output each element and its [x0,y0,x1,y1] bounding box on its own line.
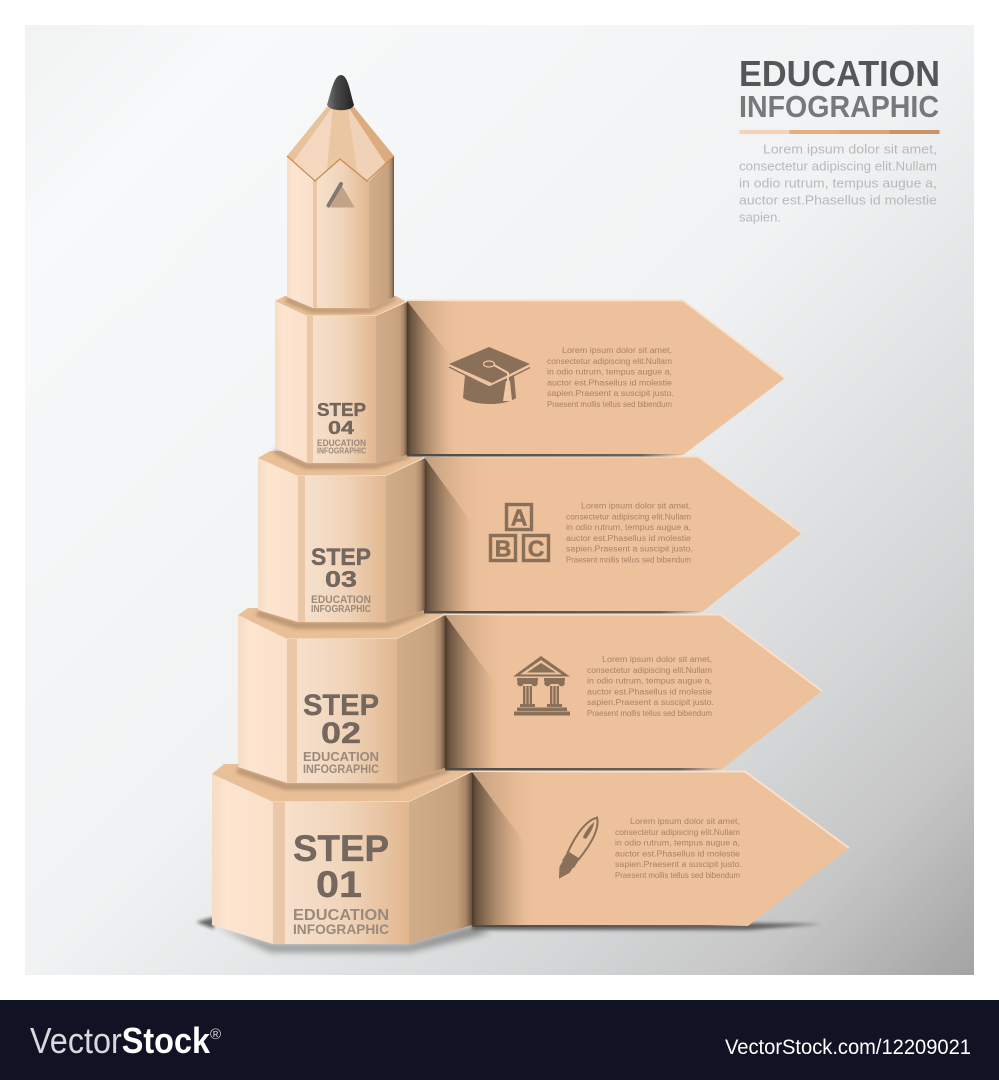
arrow 3 text: auctor est.Phasellus id molestie [566,534,692,543]
footer logo: VectorStock [30,1020,211,1061]
icon: temple [513,656,570,716]
step 1 label [293,828,389,937]
step 2 label [303,689,379,776]
step 3 label: STEP [311,544,371,571]
arrow 2 text: sapien.Praesent a suscipit justo. [587,698,714,707]
step 4 block [275,296,407,463]
step 4 label: 04 [328,418,354,438]
arrow 3 text: consectetur adipiscing elit.Nullam [566,512,691,521]
step 3 block [258,448,425,622]
colour bar [740,130,940,134]
arrow 3 text: in odio rutrum, tempus augue a, [566,523,691,532]
icon: abc blocks: A [511,504,527,530]
step 1 label: EDUCATION [293,907,389,924]
intro paragraph: auctor est.Phasellus id molestie [739,194,937,208]
arrow 4 text: auctor est.Phasellus id molestie [547,378,673,387]
step 3 label [311,544,371,615]
intro paragraph: consectetur adipiscing elit.Nullam [739,160,937,174]
step 2 label: 02 [321,717,361,750]
pencil body [287,156,394,308]
step 2 block [238,608,445,783]
pencil lead [327,75,354,110]
arrow 1 text: Praesent mollis tellus sed bibendum [615,871,740,880]
arrow 2 text: Praesent mollis tellus sed bibendum [587,709,712,718]
arrow 2 [445,614,822,770]
title: education: EDUCATION [739,53,940,94]
step 1 label: STEP [293,828,389,869]
step 3 label: INFOGRAPHIC [311,603,371,615]
icon: abc blocks [490,504,548,562]
arrow 3 text: Praesent mollis tellus sed bibendum [566,556,691,564]
icon: graduation cap [449,347,530,404]
arrow 4 text: sapien.Praesent a suscipit justo. [547,389,674,398]
step 4 label: EDUCATION [317,438,366,448]
step 4 label: STEP [317,400,366,420]
icon: fountain pen [553,814,604,881]
arrow 3 text: Lorem ipsum dolor sit amet, [581,502,691,510]
step 1 label: INFOGRAPHIC [293,921,389,937]
arrow 1 text [615,817,742,880]
arrow 4 text: consectetur adipiscing elit.Nullam [547,357,672,366]
step 3 label: EDUCATION [311,594,371,606]
arrow 1 text: sapien.Praesent a suscipit justo. [615,860,742,869]
step 1 label: 01 [316,864,362,905]
step 2 label: INFOGRAPHIC [303,762,379,776]
intro paragraph: in odio rutrum, tempus augue a, [739,176,937,190]
ground shadows [196,917,822,952]
pencil cone [287,107,394,181]
icon: triangle [328,184,354,207]
arrow 4 [407,300,785,456]
arrow 2 text: auctor est.Phasellus id molestie [587,687,713,696]
arrow 4 text: Praesent mollis tellus sed bibendum [547,400,672,409]
intro paragraph: sapien. [739,210,781,224]
arrow 2 text: consectetur adipiscing elit.Nullam [587,666,712,675]
pencil [287,75,394,308]
arrow 1 text: consectetur adipiscing elit.Nullam [615,828,740,837]
icon: abc blocks: C [528,536,544,562]
arrow 1 [472,771,849,927]
arrow 1 text: auctor est.Phasellus id molestie [615,849,741,858]
step 1 block [212,764,472,944]
step 2 label: EDUCATION [303,749,379,764]
arrow 3 text [566,502,693,564]
step 3 label: 03 [325,566,357,592]
title: infographic: INFOGRAPHIC [739,89,939,124]
footer id: VectorStock.com/12209021 [725,1036,971,1059]
registered mark: ® [210,1026,221,1043]
arrow 1 text: in odio rutrum, tempus augue a, [615,839,740,848]
arrow 4 text [547,346,674,409]
footer bar [0,1000,999,1080]
step 2 label: STEP [303,689,379,722]
step 4 label: INFOGRAPHIC [317,446,366,456]
intro paragraph [739,142,937,224]
arrow 4 text: Lorem ipsum dolor sit amet, [562,346,672,355]
arrow 2 text: Lorem ipsum dolor sit amet, [602,655,712,664]
arrow 1 text: Lorem ipsum dolor sit amet, [630,817,740,826]
arrow 4 text: in odio rutrum, tempus augue a, [547,368,672,377]
arrow 2 text [587,655,714,718]
intro paragraph: Lorem ipsum dolor sit amet, [763,142,937,156]
step 4 label [317,400,366,456]
title block [739,53,940,224]
icon: abc blocks: B [495,536,511,562]
arrow 3 text: sapien.Praesent a suscipit justo. [566,545,693,554]
arrow 2 text: in odio rutrum, tempus augue a, [587,677,712,686]
arrow 3 [424,456,802,614]
